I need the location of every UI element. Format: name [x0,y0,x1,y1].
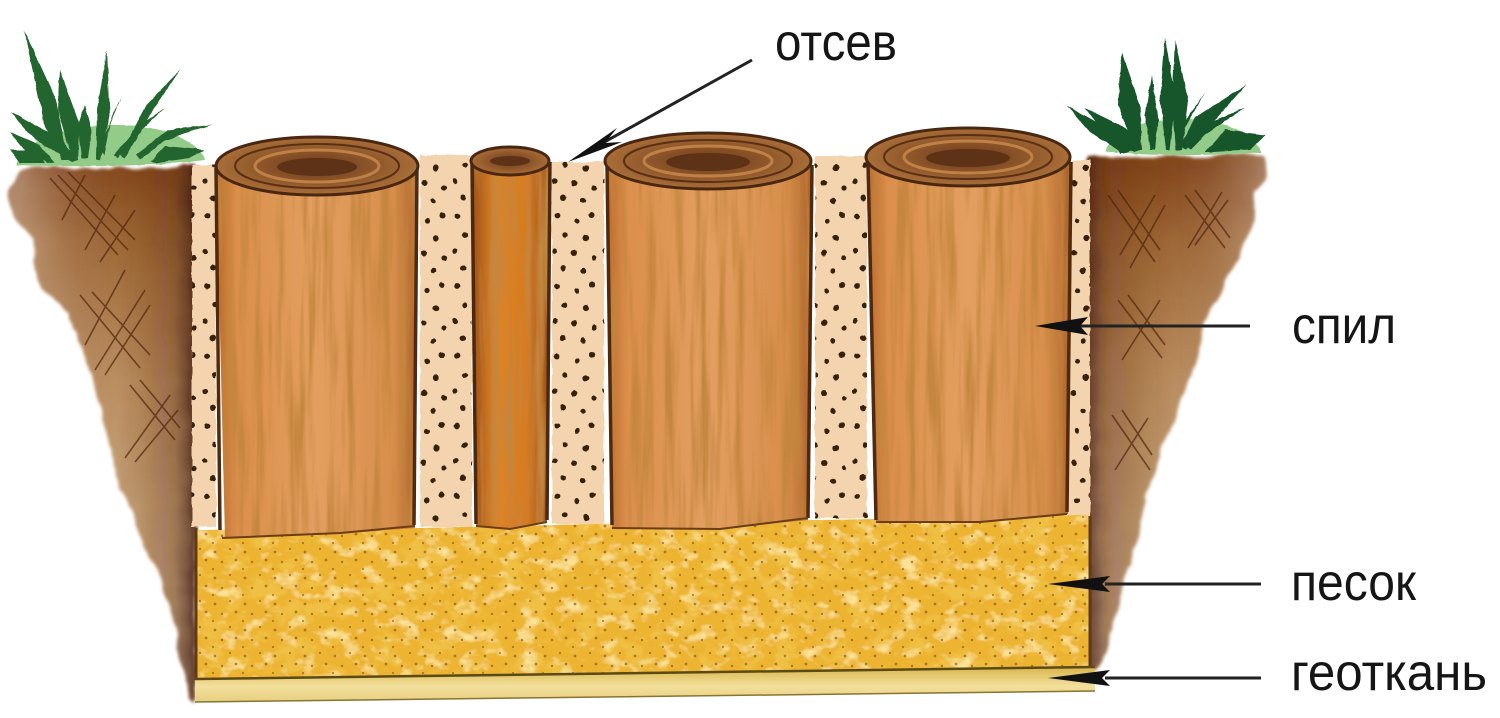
label: песок: песок [1291,554,1416,612]
label: отсев: отсев [775,14,897,72]
geotextile layer [195,667,1095,702]
label: спил: спил [1292,297,1396,355]
arrow: отсев [568,60,752,162]
sand layer [196,515,1090,680]
log 1 [216,137,418,538]
hatching: right soil [1108,190,1230,470]
log 2 [471,147,550,529]
gravel strips: отсев [192,155,1090,527]
right grass tuft [1067,38,1265,155]
arrow: песок [1048,576,1261,592]
arrow: геоткань [1048,670,1261,686]
left grass tuft [10,30,213,166]
log 3 [605,133,812,529]
log 4 [866,128,1071,522]
hatching: left soil [50,172,180,462]
label: геоткань: геоткань [1291,644,1487,702]
left soil bank [10,168,195,702]
right soil bank [1086,156,1266,672]
arrow: спил [1035,317,1250,335]
